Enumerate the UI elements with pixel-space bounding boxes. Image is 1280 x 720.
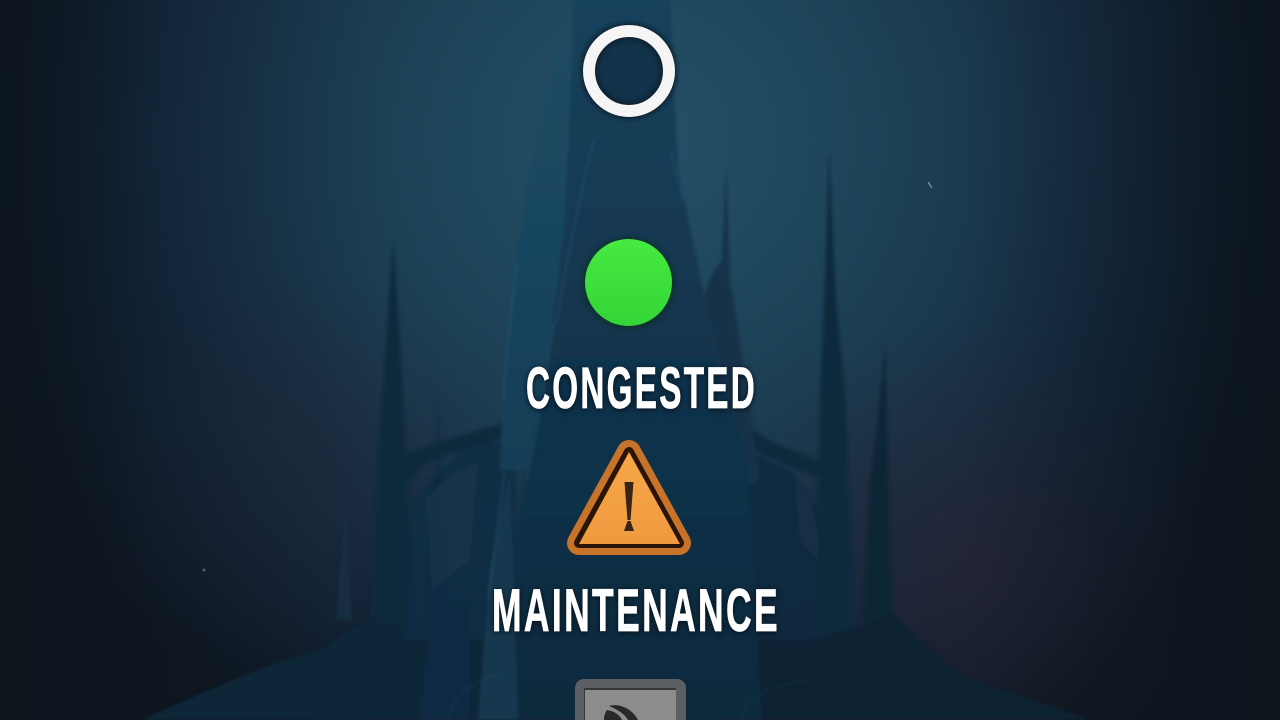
right tall spire (812, 152, 856, 680)
icon: grey square button, cropped at bottom (575, 679, 686, 720)
right arch (745, 425, 826, 480)
left lower wing (405, 440, 515, 640)
dust specks (202, 182, 932, 572)
right lower wing (740, 450, 825, 640)
inner left teal tower (500, 25, 592, 470)
icon: orange warning triangle (579, 452, 680, 544)
lower roof right (750, 613, 1090, 720)
faint back spires (336, 500, 352, 620)
label: congested: CONGESTED (526, 356, 757, 421)
teal highlight streaks on the towers (450, 140, 820, 720)
lower roof left (140, 617, 510, 720)
icon: white ring status (589, 31, 669, 111)
lower base shading (478, 470, 518, 720)
far right spire (860, 345, 896, 680)
label: maintenance: MAINTENANCE (492, 577, 780, 644)
central spire (503, 0, 762, 720)
far left spire (368, 240, 420, 680)
castle silhouette illustration (140, 0, 1090, 720)
inner right spires (696, 165, 760, 500)
left arch (400, 420, 516, 490)
icon: green status dot (582, 237, 674, 329)
